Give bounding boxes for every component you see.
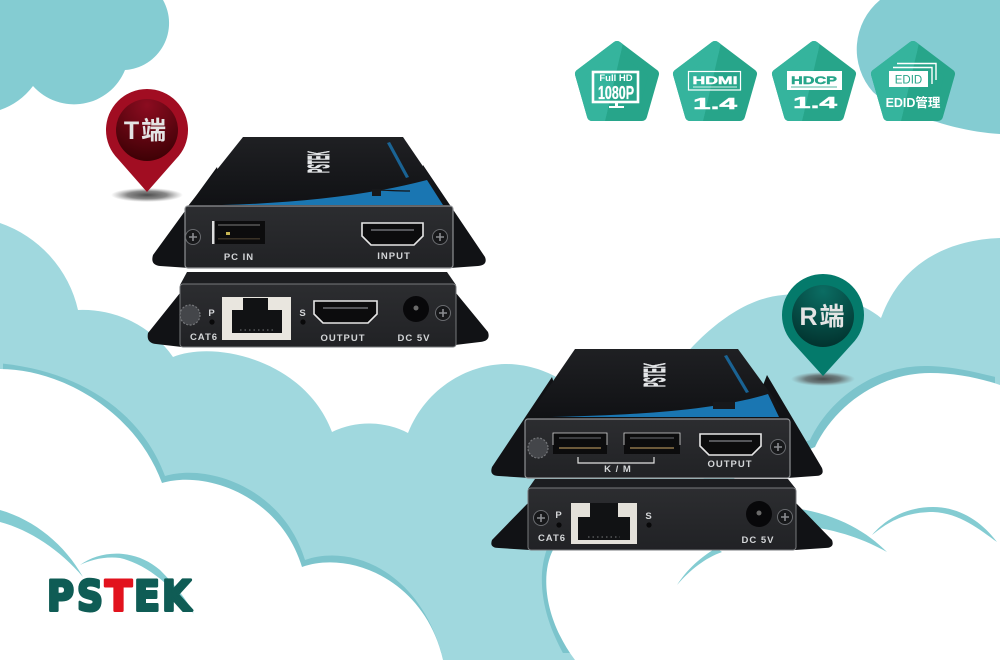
R lower device top strip (528, 479, 796, 489)
T RJ45 port (222, 297, 291, 340)
feature badge: EDID management: EDID管理 (886, 95, 941, 110)
R lower labels: CAT6 (538, 533, 566, 544)
PSTEK logo: T (105, 572, 132, 620)
R USB port 1 (553, 433, 607, 454)
background: white lower right (546, 373, 1000, 660)
PSTEK logo: E (134, 572, 160, 620)
R lower device flanges (491, 500, 833, 550)
R blue swoosh (552, 394, 779, 417)
R upper device flanges (491, 375, 823, 478)
feature badge: HDMI 1.4: 1.4 (693, 96, 737, 113)
T lower labels: S (299, 308, 307, 319)
PSTEK logo: K (162, 572, 192, 620)
T screw right (432, 230, 448, 244)
T upper device top (188, 137, 450, 206)
background: cloud edge band right (542, 366, 1000, 660)
T lower screw (436, 306, 450, 320)
feature badge: Full HD 1080P: 1080P (598, 83, 634, 103)
T lower device flanges (148, 290, 489, 347)
R lower labels (538, 510, 774, 546)
T lower labels: P (208, 308, 216, 319)
T LEDs (209, 319, 306, 325)
T upper labels: PC IN (224, 252, 254, 263)
R lower right screw (778, 510, 792, 524)
R HDMI output port (700, 434, 761, 455)
T blue swoosh (222, 180, 443, 205)
R lower labels: P (555, 510, 563, 521)
feature badge: EDID management: EDID (895, 74, 922, 86)
R device logo: PSTEK (637, 363, 672, 387)
T lower front panel (180, 284, 456, 347)
R lower front panel (528, 488, 796, 550)
T DC jack (403, 296, 429, 322)
PSTEK logo (47, 572, 192, 620)
R USB port 2 (624, 433, 680, 454)
accent: right crescents (677, 507, 997, 585)
R upper front panel (525, 419, 790, 478)
PSTEK logo: S (77, 572, 103, 620)
T device logo: PSTEK (301, 151, 336, 173)
R pin marker (782, 274, 864, 386)
T pin marker (106, 89, 188, 202)
PSTEK logo: P (47, 572, 74, 620)
T upper labels (224, 251, 411, 263)
T USB port PC IN (212, 221, 265, 244)
feature badge: HDCP 1.4: 1.4 (793, 95, 837, 112)
R upper labels: OUTPUT (707, 459, 753, 470)
R upper labels: K / M (604, 464, 632, 475)
R KM bracket (578, 457, 654, 463)
R LEDs (556, 522, 652, 528)
feature badge: HDCP 1.4 (777, 46, 851, 116)
accent: left crescents (0, 510, 194, 614)
T lower labels: OUTPUT (320, 333, 366, 344)
R lower left screw (534, 510, 548, 526)
R lower labels: S (645, 511, 653, 522)
feature badge: HDMI 1.4 (678, 46, 752, 116)
T screw left (186, 230, 200, 244)
T HDMI input port (362, 223, 423, 245)
T pin marker: T端 (124, 117, 166, 145)
R lower labels: DC 5V (742, 535, 774, 546)
T upper device flanges (152, 165, 486, 268)
feature badge: Full HD 1080P: Full HD (599, 73, 633, 84)
T lower labels (190, 308, 430, 344)
T HDMI output port (314, 301, 377, 323)
R DC jack (746, 501, 772, 527)
T lower device top strip (180, 272, 456, 285)
feature badge: HDCP 1.4: HDCP (791, 75, 837, 87)
T upper labels: INPUT (377, 251, 411, 262)
background: white lower left (0, 369, 443, 660)
feature badge: EDID management (876, 46, 950, 116)
background: cloud edge band left (0, 362, 446, 660)
R certification seal (528, 438, 548, 458)
feature badge: HDMI 1.4: HDMI (692, 75, 738, 87)
R upper labels (604, 459, 753, 475)
background: top-left cloud (0, 0, 169, 110)
R upper screw (770, 440, 786, 454)
R unit: stacked devices (491, 349, 833, 550)
background: top-right cloud (857, 0, 1000, 134)
R pin marker: R端 (799, 303, 845, 331)
background: large middle cloud (0, 223, 1000, 660)
T upper front panel (185, 206, 453, 268)
T lower labels: DC 5V (398, 333, 430, 344)
R upper device top (527, 349, 789, 419)
T certification seal (180, 305, 200, 325)
feature badge: Full HD 1080P (580, 46, 654, 116)
T unit: stacked devices (148, 137, 489, 347)
R RJ45 port (571, 503, 637, 544)
T lower labels: CAT6 (190, 332, 218, 343)
